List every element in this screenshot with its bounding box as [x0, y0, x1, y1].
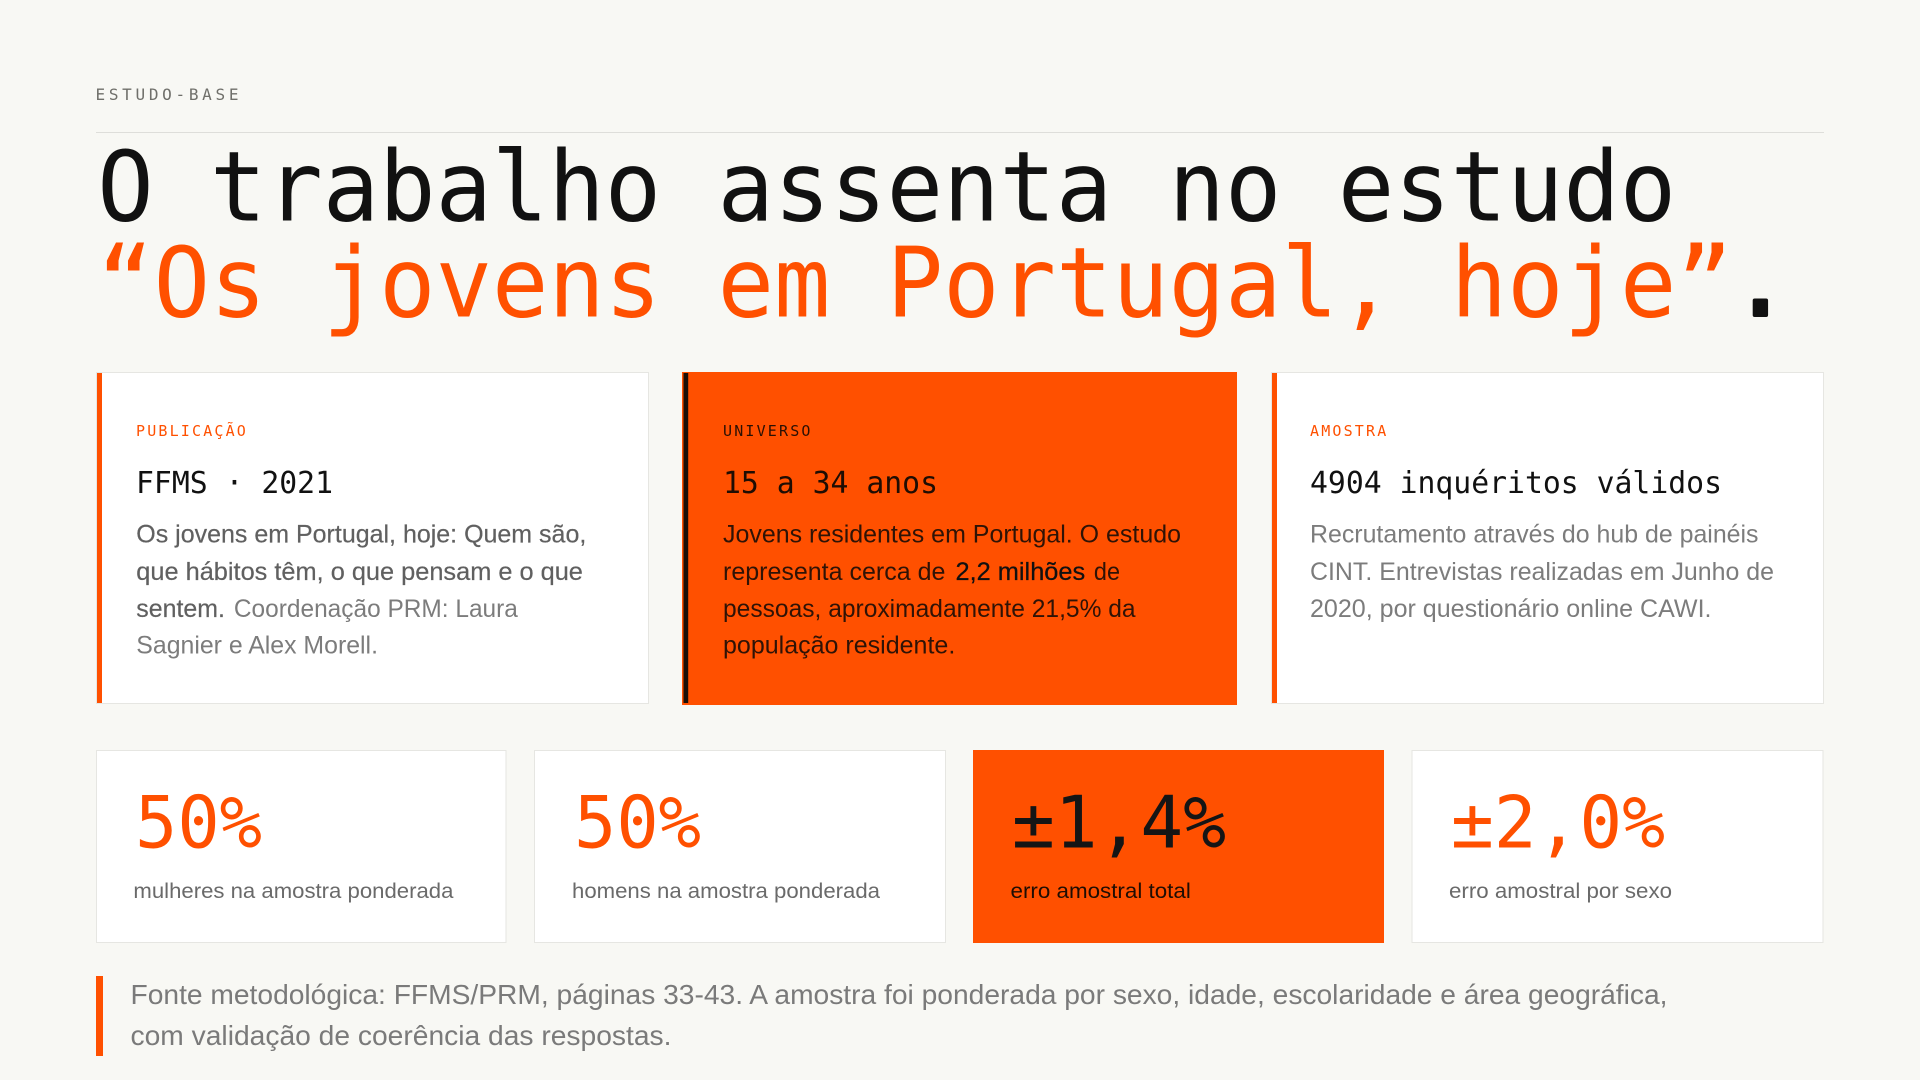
text block: universo: 2,2 milhões	[956, 558, 1085, 586]
text block: amostra	[1310, 521, 1774, 623]
text block: publicação	[136, 521, 586, 660]
text block: publicação: sentem.	[136, 595, 225, 623]
text block: universo: pessoas, aproximadamente 21,5% da	[723, 595, 1136, 623]
panel: publicação	[96, 372, 648, 704]
stat: erro amostral por sexo	[1412, 750, 1823, 942]
stat: erro amostral por sexo: ±2,0%	[1451, 780, 1665, 864]
stat: 50% mulheres	[96, 750, 506, 942]
heading: FFMS 2021: FFMS · 2021	[136, 466, 333, 501]
text block: publicação: Os jovens em Portugal, hoje: Quem são,	[136, 521, 586, 549]
text block: universo	[723, 521, 1181, 660]
stat: 50% homens: 50%	[574, 780, 701, 864]
stat: erro amostral total: ±1,4%	[1012, 780, 1226, 864]
title: “Os jovens em Portugal, hoje”	[97, 226, 1733, 340]
stat: erro amostral total: erro amostral total	[1010, 880, 1191, 903]
heading: 4904 inquéritos válidos: 4904 inquéritos válidos	[1310, 466, 1722, 501]
stat: erro amostral total	[973, 750, 1384, 943]
stat: erro amostral por sexo: erro amostral por sexo	[1449, 880, 1672, 903]
text block: publicação: que hábitos têm, o que pensam e o que	[136, 558, 583, 586]
source note	[96, 976, 1668, 1056]
text block: amostra: Recrutamento através do hub de painéis	[1310, 521, 1758, 549]
heading: 15 a 34 anos: 15 a 34 anos	[723, 466, 938, 501]
eyebrow: estudo-base: ESTUDO-BASE	[96, 85, 242, 104]
source note: com validação de coerência das respostas.	[130, 1020, 672, 1051]
label: publicação: PUBLICAÇÃO	[136, 421, 248, 440]
panel: universo	[682, 372, 1237, 705]
text block: publicação: Coordenação PRM: Laura	[234, 595, 518, 623]
text block: universo: Jovens residentes em Portugal. O estudo	[723, 521, 1181, 549]
text block: universo: população residente.	[723, 632, 955, 660]
stat: 50% homens	[534, 750, 946, 942]
text block: amostra: 2020, por questionário online CAWI.	[1310, 595, 1712, 623]
title: .	[1732, 225, 1789, 338]
text block: amostra: CINT. Entrevistas realizadas em Junho de	[1310, 558, 1774, 586]
panel: amostra	[1272, 372, 1824, 704]
label: universo: UNIVERSO	[723, 422, 813, 440]
stat: 50% homens: homens na amostra ponderada	[572, 880, 880, 903]
source note: Fonte metodológica: FFMS/PRM, páginas 33-43. A amostra foi ponderada por sexo, idade, escolaridade e área geográfica,	[130, 979, 1668, 1010]
title	[97, 130, 1789, 340]
stat: 50% mulheres: mulheres na amostra ponderada	[133, 880, 454, 903]
text block: universo: representa cerca de	[723, 558, 945, 586]
title: O trabalho assenta no estudo	[97, 130, 1676, 244]
text block: universo: de	[1094, 558, 1120, 586]
text block: publicação: Sagnier e Alex Morell.	[136, 632, 378, 660]
stat: 50% mulheres: 50%	[135, 780, 262, 864]
label: amostra: AMOSTRA	[1310, 422, 1388, 440]
